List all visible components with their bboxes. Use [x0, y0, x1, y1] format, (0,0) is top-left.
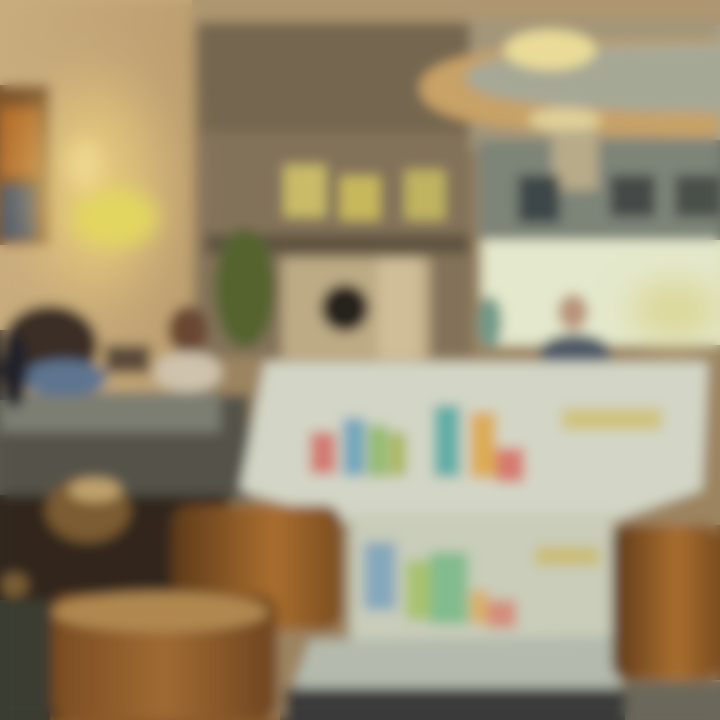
bar group right: [434, 405, 524, 482]
chart board lower: [350, 512, 612, 642]
wooden stool centre: [172, 505, 342, 630]
ceiling light ring: [420, 30, 720, 200]
figure right: [478, 294, 611, 370]
window: [478, 130, 720, 345]
laptop base: [285, 636, 720, 720]
lower bars: [364, 542, 516, 628]
plant: [215, 228, 275, 348]
dark side and stool foreground: [0, 573, 277, 720]
bar group left: [310, 418, 406, 477]
lower legend blur: [535, 546, 600, 566]
lower dark floor: [0, 495, 230, 720]
appliance with round door: [282, 258, 430, 360]
small bowl left: [46, 478, 130, 542]
sofa and seated people: [0, 305, 250, 500]
painting: [0, 85, 50, 245]
wall lamp glow: [35, 85, 159, 295]
chart board upper: [240, 362, 708, 522]
wooden stool right: [612, 525, 720, 680]
legend text blur: [562, 408, 662, 430]
glowing wall tiles: [284, 165, 445, 220]
shelf: [205, 234, 470, 254]
